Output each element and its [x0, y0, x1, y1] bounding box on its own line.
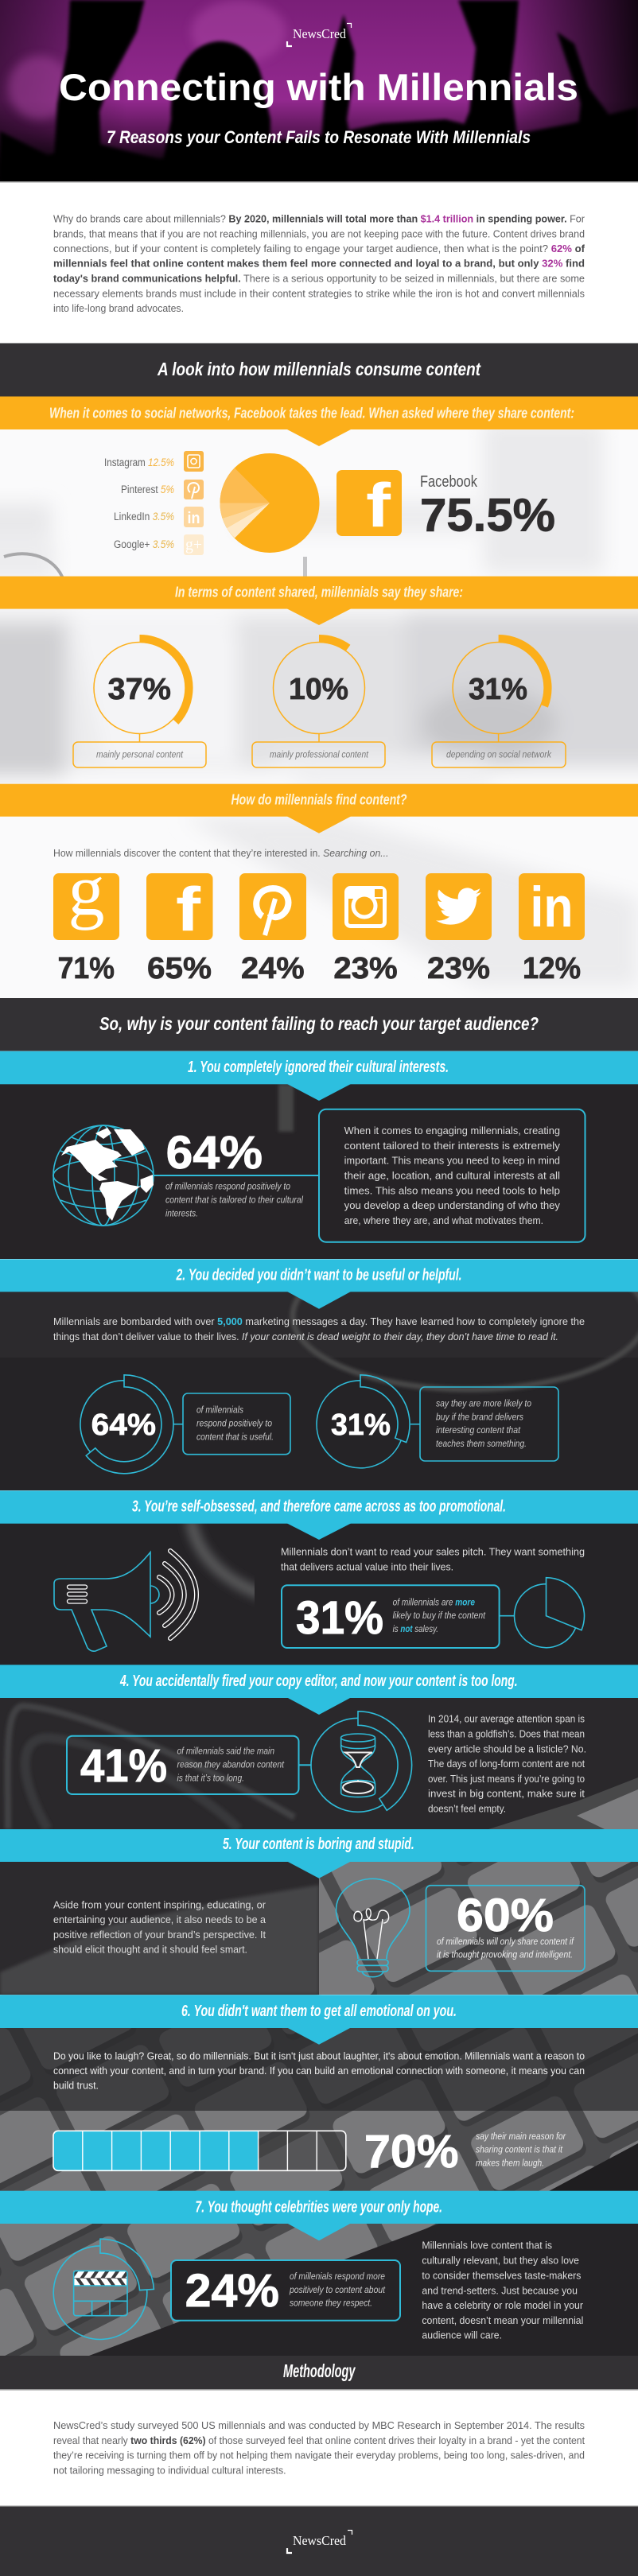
- stat: 70%: 70%: [364, 2126, 458, 2178]
- callout: 60%: 60%: [457, 1890, 554, 1941]
- panel: why is your content failing: [0, 998, 638, 1051]
- legend row: Instagram: Instagram 12.5%: [104, 457, 174, 468]
- band: social networks: [0, 396, 638, 446]
- donut: 31% depending: [432, 639, 566, 767]
- icon: light bulb: [336, 1879, 410, 1977]
- caption: 70%: [476, 2132, 566, 2169]
- text: reason 5: Aside from your content inspiring, educating, or: [53, 1899, 266, 1910]
- title: Connecting with Millennials: [59, 66, 578, 108]
- icon: Twitter: [426, 873, 492, 940]
- icon: Facebook: [337, 470, 402, 540]
- text: reason 4: In 2014, our average attention span is: [428, 1714, 585, 1725]
- ring chart with hourglass: [299, 1712, 412, 1812]
- chart: share pie: [220, 453, 320, 553]
- donut: 10% professional: [252, 639, 385, 767]
- band: reason 4: [0, 1665, 638, 1715]
- callout: 31%: 31%: [296, 1592, 383, 1644]
- ring chart: 31%: [317, 1375, 420, 1468]
- text: reason 4: every article should be a listicle? No.: [428, 1743, 586, 1754]
- intro paragraph: today's brand communications helpful. There is a serious opportunity to be seized in millennials, but there are some: [53, 274, 585, 285]
- icon: LinkedIn: in: [530, 876, 573, 939]
- icon: globe: [53, 1125, 154, 1226]
- stat: Twitter: 23%: [427, 952, 490, 985]
- intro paragraph: [53, 213, 585, 314]
- band: find content: How do millennials find content?: [231, 792, 407, 808]
- callout: 41%: of millennials said the main: [177, 1747, 274, 1757]
- text: reason 7: content, doesn’t mean your millennial: [422, 2315, 583, 2326]
- band: reason 7: 7. You thought celebrities were your only hope.: [196, 2199, 442, 2217]
- callout box: times. This also means you need tools to help: [344, 1185, 560, 1196]
- text: reason 6: Do you like to laugh? Great, so do millennials. But it isn't just about laughter, it's about emotion. Millennials want a reason to: [53, 2050, 585, 2061]
- callout: 31%: interesting content that: [436, 1426, 521, 1436]
- callout: 60%: of millennials will only share content if: [437, 1937, 575, 1947]
- ring chart: 64%: 64%: [91, 1408, 156, 1442]
- text: reason 5: entertaining your audience, it also needs to be a: [53, 1914, 266, 1925]
- donut: 31% depending: depending on social network: [446, 751, 552, 760]
- caption: 70%: sharing content is that it: [476, 2146, 563, 2155]
- text: reason 6: build trust.: [53, 2081, 99, 2092]
- panel: footer: [0, 2505, 638, 2576]
- intro paragraph: brands, that means that if you are not reaching millennials, you are not keeping pace with the future. Content drives brand: [53, 228, 585, 239]
- text: reason 4: less than a goldfish’s. Does that mean: [428, 1728, 585, 1739]
- text: reason 4: over. This just means if you’re going to: [428, 1774, 585, 1785]
- text: reason 7: culturally relevant, but they also love: [422, 2255, 579, 2267]
- donut: 10% professional: 10%: [289, 673, 348, 706]
- text: reason 3: that delivers actual value into their lives.: [281, 1561, 453, 1572]
- callout: 31%: teaches them something.: [436, 1440, 527, 1449]
- icon: Pinterest: [239, 873, 306, 940]
- panel: header: [0, 0, 638, 183]
- callout: 64%: respond positively to: [196, 1420, 273, 1429]
- legend: other networks: [104, 451, 204, 555]
- band: reason 6: [0, 1995, 638, 2045]
- text: reason 3: [281, 1546, 585, 1572]
- band: reason 3: [0, 1490, 638, 1540]
- callout box: you develop a deep understanding of who they: [344, 1200, 561, 1211]
- caption: 70%: makes them laugh.: [476, 2159, 544, 2169]
- intro paragraph: into life-long brand advocates.: [53, 303, 184, 314]
- heading: a look into: A look into how millennials consume content: [157, 359, 481, 379]
- donut: 37% personal: 37%: [108, 673, 171, 706]
- ring chart: 31%: 31%: [331, 1408, 391, 1442]
- band: reason 5: [0, 1829, 638, 1879]
- callout: 31%: [420, 1387, 558, 1461]
- legend row: Google+: Google+ 3.5%: [114, 538, 174, 550]
- panel: reason 4: [0, 1665, 638, 1829]
- caption: 64%: content that is tailored to their cultural: [165, 1195, 303, 1205]
- callout box: [319, 1109, 585, 1242]
- panel: methodology heading: Methodology: [283, 2360, 356, 2381]
- chart: progress bar 70%: [53, 2131, 346, 2170]
- band: content shared: [0, 577, 638, 625]
- intro paragraph: Why do brands care about millennials? By 2020, millennials will total more than $1.4 trillion in spending power. For: [53, 213, 585, 224]
- legend row: Pinterest: Pinterest 5%: [121, 484, 174, 495]
- band: find content: [0, 784, 638, 833]
- band: reason 1: 1. You completely ignored their cultural interests.: [188, 1059, 449, 1076]
- text: reason 7: have a celebrity or role model in your: [422, 2300, 583, 2311]
- stat: 64%: 64%: [166, 1127, 263, 1179]
- methodology text: they’re receiving is turning them off by not helping them navigate their everyday problems, being too long, sales-driven, and: [53, 2450, 585, 2461]
- intro paragraph: connections, but if your content is completely failing to engage your target audience, then what is the point? 62% of: [53, 243, 585, 254]
- band: content shared: In terms of content shared, millennials say they share:: [175, 585, 463, 600]
- stat: Facebook: 75.5%: [420, 490, 555, 541]
- caption: 70%: say their main reason for: [476, 2132, 566, 2142]
- text: reason 6: connect with your content, and in turn your brand. If you can build an emotional connection with someone, it means you can: [53, 2065, 585, 2077]
- icon: Facebook: f: [366, 470, 391, 540]
- callout: 64%: of millennials: [196, 1406, 243, 1416]
- band: reason 1: [0, 1051, 638, 1101]
- callout: 60%: [426, 1886, 585, 1971]
- ring chart: 64%: [80, 1375, 183, 1474]
- callout: 31%: likely to buy if the content: [393, 1611, 486, 1621]
- callout box: When it comes to engaging millennials, creating: [344, 1125, 560, 1136]
- caption: 64%: interests.: [165, 1209, 198, 1218]
- callout: 64%: content that is useful.: [196, 1432, 274, 1442]
- intro paragraph: millennials feel that online content makes them feel more connected and loyal to a brand, but only 32% find: [53, 258, 585, 270]
- donut: 10% professional: mainly professional content: [270, 751, 369, 760]
- legend row: LinkedIn: LinkedIn 3.5%: [114, 511, 174, 523]
- callout box: important. This means you need to keep in mind: [344, 1156, 560, 1167]
- caption: 64%: of millennials respond positively to: [165, 1183, 291, 1192]
- stat: Pinterest: 24%: [241, 952, 305, 985]
- callout: 64%: [183, 1393, 290, 1455]
- callout: 41%: is that it’s too long.: [177, 1774, 244, 1783]
- stat: Facebook: 65%: [147, 952, 212, 985]
- text: reason 4: invest in big content, make sure it: [428, 1789, 585, 1800]
- ring chart with clapperboard: [53, 2239, 154, 2339]
- panel: why is your content failing: So, why is your content failing to reach your target audience?: [99, 1013, 539, 1034]
- text: reason 3: Millennials don’t want to read your sales pitch. They want something: [281, 1546, 585, 1557]
- callout: 31%: is not salesy.: [393, 1625, 438, 1634]
- callout: 41%: [67, 1736, 299, 1794]
- callout: 24%: 24%: [185, 2265, 279, 2317]
- panel: reason 3: [0, 1490, 638, 1665]
- panel: reason 1: [0, 1051, 638, 1259]
- icon: Google: g: [68, 849, 105, 931]
- stat: LinkedIn: 12%: [523, 952, 581, 985]
- callout box: are, where they are, and what motivates them.: [344, 1215, 543, 1226]
- stat: Google: 71%: [58, 952, 115, 985]
- icon: Google: [53, 849, 119, 940]
- text: reason 2: [53, 1316, 585, 1342]
- panel: reason 7: [0, 2191, 638, 2356]
- logo: NewsCred: [287, 24, 352, 46]
- logo: NewsCred: NewsCred: [293, 26, 346, 41]
- methodology text: not tailoring messaging to individual cultural interests.: [53, 2465, 286, 2476]
- caption: 64%: [165, 1183, 303, 1218]
- text: reason 4: The days of long-form content are not: [428, 1758, 585, 1770]
- text: reason 2: Millennials are bombarded with over 5,000 marketing messages a day. They have learned how to completely ignore the: [53, 1316, 585, 1327]
- methodology text: [53, 2420, 585, 2476]
- icon: Google+ small: g+: [185, 536, 202, 554]
- subtitle: 7 Reasons your Content Fails to Resonate With Millennials: [107, 127, 531, 147]
- callout: 31%: of millennials are more: [393, 1598, 476, 1607]
- chart: 31% pie: [500, 1578, 585, 1648]
- callout box: their age, location, and cultural interests at all: [344, 1171, 560, 1182]
- band: reason 2: [0, 1259, 638, 1309]
- panel: methodology heading: [0, 2356, 638, 2391]
- callout: 24%: of millenials respond more: [290, 2272, 385, 2282]
- intro paragraph: necessary elements brands must include in their content strategies to strike while the iron is hot and convert millennials: [53, 288, 585, 299]
- text: reason 4: [428, 1714, 586, 1814]
- callout: 31%: say they are more likely to: [436, 1399, 532, 1408]
- text: reason 7: and trend-setters. Just because you: [422, 2285, 578, 2296]
- stat: Facebook: Facebook: [420, 473, 478, 491]
- panel: reason 5: [0, 1829, 638, 1995]
- text: reason 7: audience will care.: [422, 2330, 502, 2341]
- icon: Facebook: f: [176, 874, 201, 944]
- donut: 31% depending: 31%: [469, 673, 527, 706]
- text: reason 2: things that don’t deliver value to their lives. If your content is dead weight to their day, they don’t have time to read it.: [53, 1331, 558, 1342]
- logo: NewsCred footer: [287, 2531, 352, 2553]
- text: reason 5: should elicit thought and it should feel smart.: [53, 1945, 247, 1956]
- panel: reason 2: [0, 1243, 638, 1490]
- callout: 24%: [171, 2260, 400, 2321]
- icon: Instagram small: [184, 451, 204, 472]
- callout: 31%: buy if the brand delivers: [436, 1412, 523, 1422]
- text: reason 7: to consider themselves taste-makers: [422, 2270, 581, 2281]
- donut: 37% personal: [73, 639, 206, 767]
- callout box: content tailored to their interests is extremely: [344, 1140, 561, 1152]
- band: reason 5: 5. Your content is boring and stupid.: [223, 1836, 414, 1853]
- donut: 37% personal: mainly personal content: [96, 751, 184, 760]
- callout: 41%: reason they abandon content: [177, 1760, 285, 1770]
- icon: Pinterest small: [184, 480, 204, 499]
- logo: NewsCred footer: NewsCred: [293, 2533, 346, 2548]
- text: reason 7: [422, 2240, 583, 2341]
- band: reason 2: 2. You decided you didn’t want to be useful or helpful.: [176, 1266, 461, 1284]
- band: reason 7: [0, 2191, 638, 2240]
- icon: megaphone: [54, 1551, 196, 1651]
- callout: 24%: positively to content about: [289, 2286, 386, 2295]
- icon: Facebook: [146, 873, 213, 944]
- text: reason 5: [53, 1899, 266, 1956]
- text: reason 6: [53, 2050, 585, 2092]
- callout: 60%: it is thought provoking and intelligent.: [437, 1951, 573, 1960]
- callout: 24%: someone they respect.: [290, 2299, 372, 2309]
- panel: reason 6: [0, 1995, 638, 2191]
- callout: 31%: [282, 1585, 500, 1648]
- text: searching on: How millennials discover the content that they’re interested in. Searching on...: [53, 847, 388, 859]
- stat: Instagram: 23%: [333, 952, 398, 985]
- methodology text: reveal that nearly two thirds (62%) of those surveyed feel that online content drives their loyalty in a brand - yet the content: [53, 2435, 585, 2446]
- text: reason 7: Millennials love content that is: [422, 2240, 552, 2252]
- panel: how millennials consume content: [0, 343, 638, 998]
- icon: Instagram: [333, 873, 399, 940]
- band: reason 6: 6. You didn't want them to get all emotional on you.: [181, 2003, 457, 2020]
- text: reason 5: positive reflection of your brand’s perspective. It: [53, 1929, 266, 1941]
- methodology text: NewsCred’s study surveyed 500 US millennials and was conducted by MBC Research in September 2014. The results: [53, 2420, 585, 2431]
- callout: 41%: 41%: [80, 1740, 167, 1792]
- text: reason 4: doesn’t feel empty.: [428, 1803, 506, 1814]
- icon: LinkedIn small: in: [188, 510, 200, 527]
